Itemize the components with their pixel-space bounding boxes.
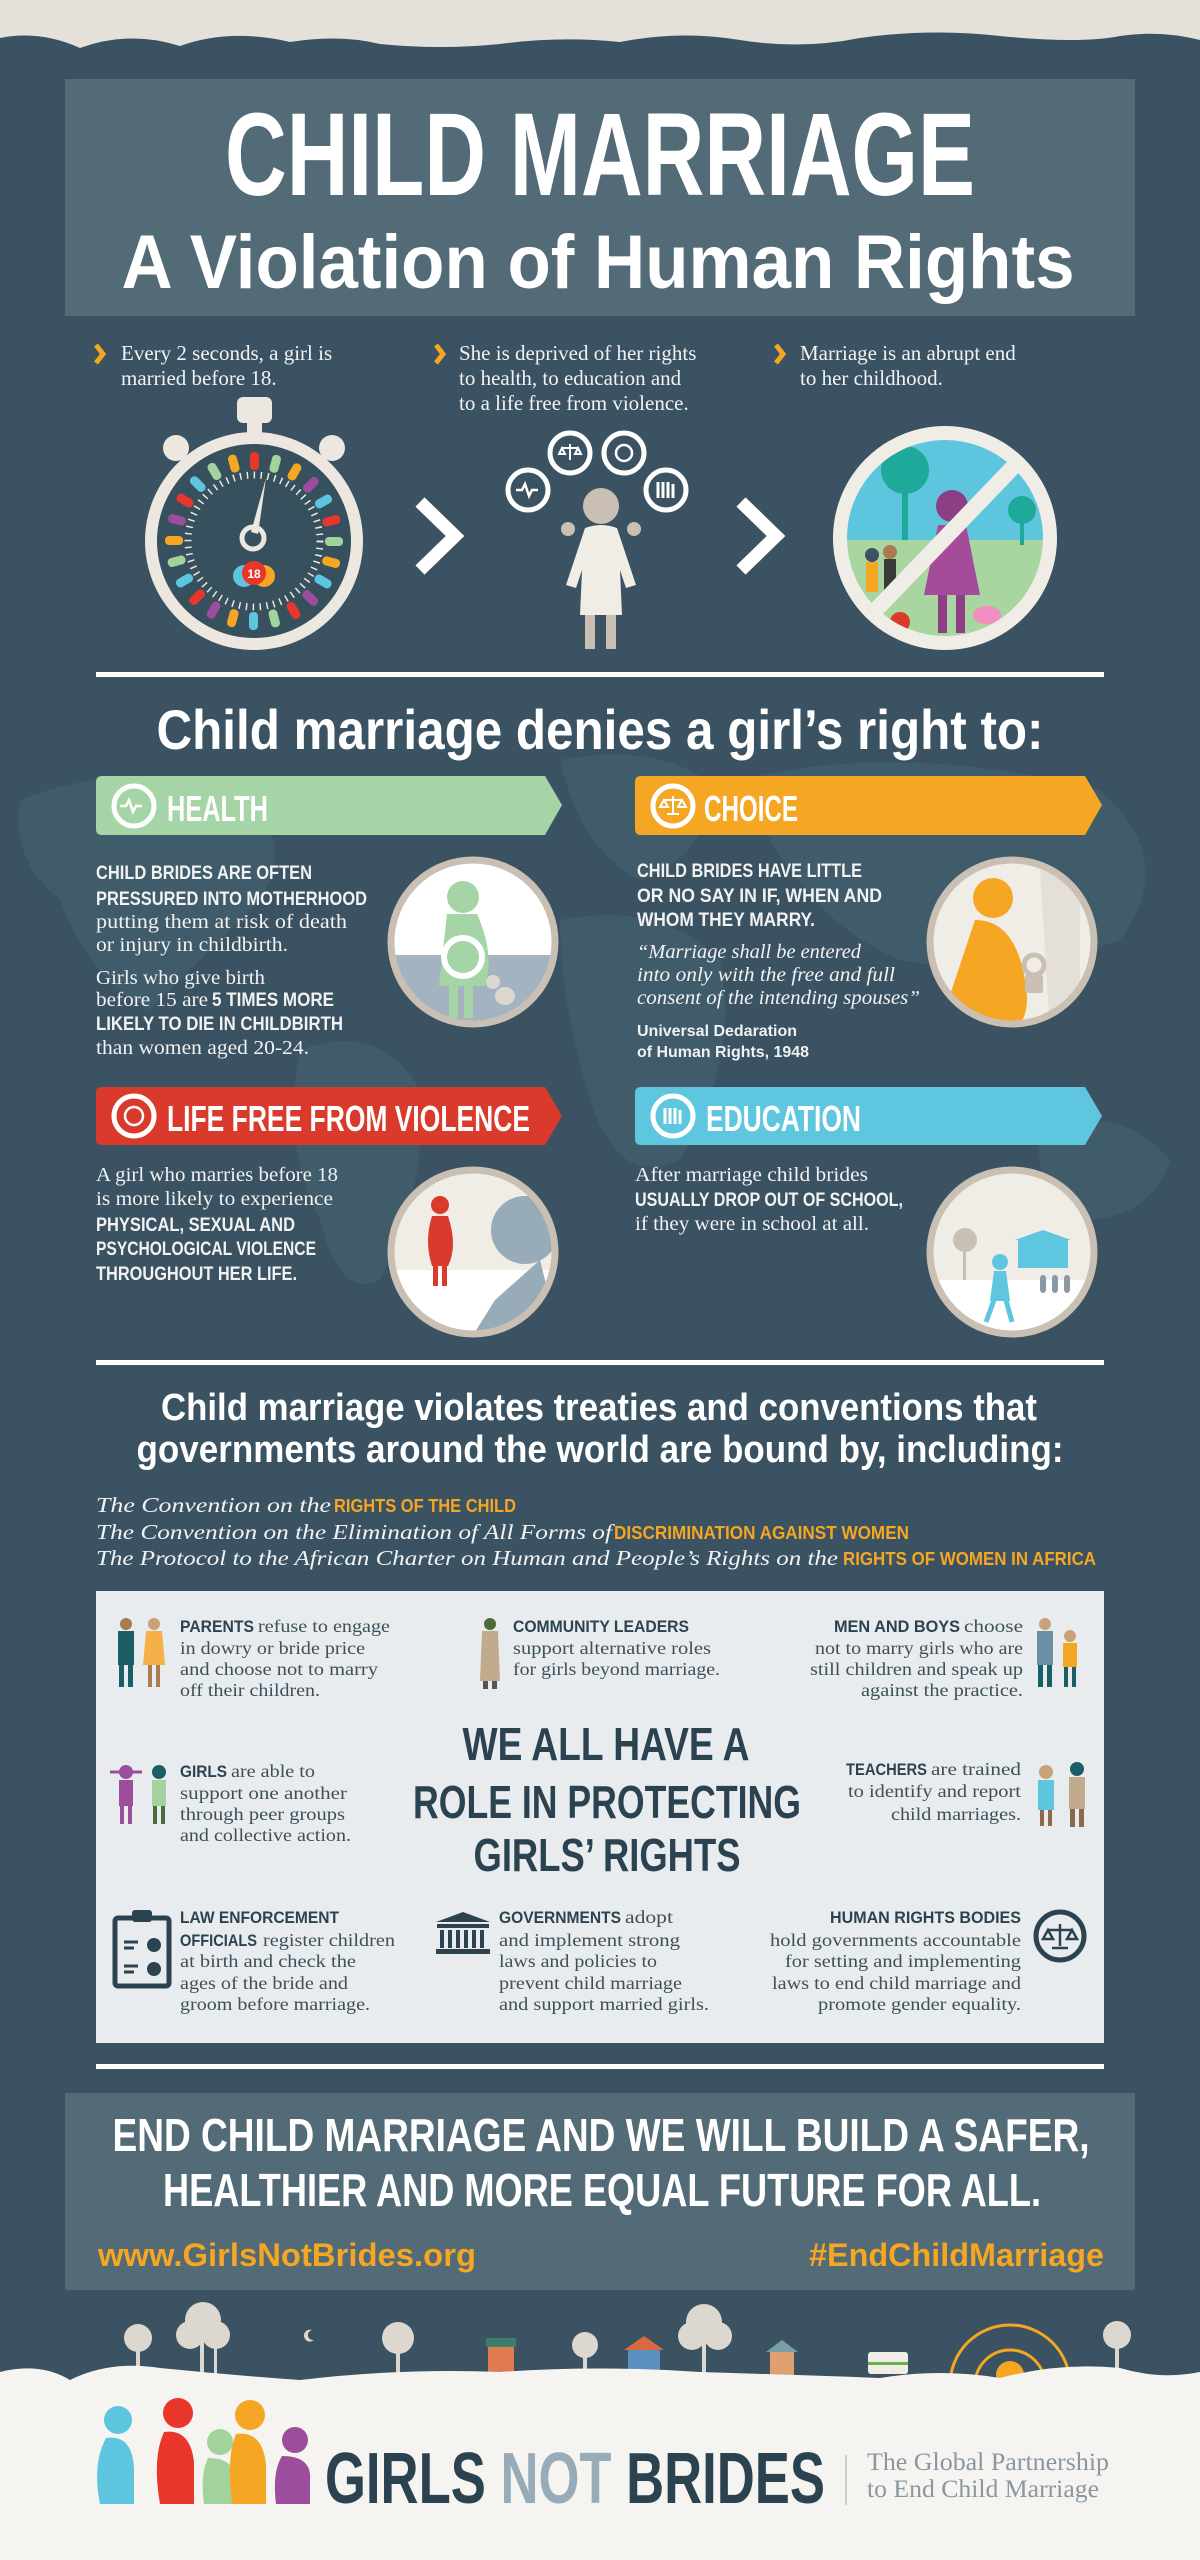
text: teachers [846,1759,1021,1824]
text: parents: off their children. [180,1680,320,1700]
top cream sky [0,0,1200,80]
text: human rights bodies: for setting and implementing [785,1951,1021,1971]
icon: teachers [1038,1762,1085,1827]
icon: community leader [480,1618,500,1689]
text: treaty list: The Protocol to the African Charter on Human and People’s Rights on the [96,1546,838,1570]
text: choice: WHOM THEY MARRY. [637,910,815,931]
banner: choice: CHOICE [704,788,798,829]
text: choice: “Marriage shall be entered [637,941,862,963]
text: human rights bodies [770,1908,1021,2014]
banner: education [635,1087,1102,1145]
icon: childhood forbidden circle [834,427,1056,650]
bullet 3: to her childhood. [800,366,943,390]
text: choice: of Human Rights, 1948 [637,1044,809,1061]
icon: girl leaving school [930,1170,1100,1340]
text: choice: CHILD BRIDES HAVE LITTLE [637,861,862,882]
text: parents [180,1616,390,1700]
icon: man and boy [1037,1618,1077,1687]
logo: girls not brides: to End Child Marriage [867,2476,1099,2503]
icon: government building [436,1912,490,1954]
text: law enforcement [180,1908,395,2014]
logo: girls not brides [97,2398,1109,2519]
text: health: before 15 are [96,989,208,1011]
bullet 1: married before 18. [121,366,277,390]
text: teachers: TEACHERS [846,1760,927,1779]
banner: violence: LIFE FREE FROM VIOLENCE [167,1098,530,1139]
text: men and boys [810,1616,1023,1700]
text: health: Girls who give birth [96,967,265,989]
heading: treaties [136,1387,1064,1471]
text: choice [637,861,920,1061]
arrow 2 [741,502,776,570]
text: governments [499,1907,709,2014]
text: health [96,863,367,1059]
text: choice: into only with the free and full [637,964,895,986]
text: law enforcement: register children [263,1930,395,1950]
text: governments: GOVERNMENTS [499,1908,621,1927]
text: violence: PSYCHOLOGICAL VIOLENCE [96,1239,316,1260]
text: community leaders: COMMUNITY LEADERS [513,1617,689,1636]
text: parents: in dowry or bride price [180,1638,365,1658]
text: health: LIKELY TO DIE IN CHILDBIRTH [96,1014,343,1035]
text: health: CHILD BRIDES ARE OFTEN [96,863,312,884]
heading: treaties: governments around the world are bound by, including: [136,1429,1064,1471]
icon: scales [1036,1912,1084,1960]
text: governments: adopt [625,1907,673,1927]
text: community leaders: for girls beyond marriage. [513,1659,720,1679]
text: health: or injury in childbirth. [96,934,288,956]
text: violence [96,1164,338,1285]
callout: end child marriage [65,2093,1135,2290]
text: health: putting them at risk of death [96,911,347,933]
text: teachers: are trained [931,1759,1021,1779]
text: choice: consent of the intending spouses” [637,987,920,1009]
text: treaty list: DISCRIMINATION AGAINST WOMEN [614,1523,909,1543]
text: governments: prevent child marriage [499,1973,682,1993]
world map faint background [18,754,1170,1284]
text: girls: support one another [180,1783,347,1803]
panel: violence [96,1087,562,1340]
icon: parents [118,1618,165,1687]
text: governments: and support married girls. [499,1994,709,2014]
text: human rights bodies: HUMAN RIGHTS BODIES [830,1908,1021,1927]
text: men and boys: choose [964,1616,1023,1636]
bullet 2: to health, to education and [459,366,682,390]
callout: end child marriage: www.GirlsNotBrides.org [97,2237,476,2273]
text: teachers: to identify and report [848,1781,1021,1801]
callout: end child marriage: #EndChildMarriage [809,2237,1104,2273]
text: girls: GIRLS [180,1762,227,1781]
panel: choice [635,776,1102,1061]
text: girls [180,1761,351,1845]
text: violence: is more likely to experience [96,1188,333,1210]
text: violence: THROUGHOUT HER LIFE. [96,1264,297,1285]
text: treaty list: The Convention on the [96,1493,331,1517]
icon: girl with rights icons [508,433,686,649]
icon: girl with lock [930,860,1094,1040]
text: governments: laws and policies to [499,1951,657,1971]
arrow 1 [420,502,455,570]
icon: stopwatch: 18 [247,567,261,581]
text: human rights bodies: laws to end child marriage and [772,1973,1021,1993]
text: health: than women aged 20-24. [96,1037,309,1059]
icon: girls [110,1765,166,1824]
text: men and boys: against the practice. [861,1680,1023,1700]
text: teachers: child marriages. [891,1804,1021,1824]
text: community leaders [513,1617,720,1679]
banner: health: HEALTH [167,788,268,829]
bullet 1 [96,341,332,390]
text: choice: OR NO SAY IN IF, WHEN AND [637,886,882,907]
text: health: 5 TIMES MORE [212,990,334,1011]
text: human rights bodies: promote gender equality. [818,1994,1021,2014]
panel: roles [96,1591,1104,2043]
text: health: PRESSURED INTO MOTHERHOOD [96,889,367,910]
heading: treaties: Child marriage violates treaties and conventions that [161,1387,1037,1429]
icon: pregnant girl [390,860,560,1035]
logo: girls not brides: The Global Partnership [867,2449,1109,2476]
text: parents: refuse to engage [258,1616,390,1636]
banner: violence [96,1087,562,1145]
heading: we all have a role [413,1718,801,1881]
landscape [0,2302,1200,2560]
text: treaty list: The Convention on the Elimination of All Forms of [96,1520,616,1544]
text: girls: are able to [231,1761,315,1781]
bullet 2: She is deprived of her rights [459,341,696,365]
heading: denies: Child marriage denies a girl’s right to: [156,698,1044,761]
text: human rights bodies: hold governments accountable [770,1930,1021,1950]
bullet 2 [436,341,696,415]
bullet 2: to a life free from violence. [459,391,689,415]
heading: we all have a role: ROLE IN PROTECTING [413,1776,801,1828]
text: treaty list [96,1493,1096,1570]
banner: health [96,776,562,835]
text: education: USUALLY DROP OUT OF SCHOOL, [635,1190,903,1211]
text: community leaders: support alternative roles [513,1638,711,1658]
bullet 3: Marriage is an abrupt end [800,341,1016,365]
text: men and boys: MEN AND BOYS [834,1617,960,1636]
text: men and boys: not to marry girls who are [815,1638,1023,1658]
text: education: After marriage child brides [635,1164,868,1186]
title box: A Violation of Human Rights [122,220,1074,305]
panel: education [635,1087,1102,1340]
text: law enforcement: OFFICIALS [180,1931,257,1950]
icon: stopwatch [145,397,363,650]
text: education [635,1164,903,1235]
icon: girl and shadow [390,1170,560,1340]
text: girls: and collective action. [180,1825,351,1845]
banner: choice [635,776,1102,835]
text: men and boys: still children and speak up [810,1659,1023,1679]
logo: girls not brides: GIRLS NOT BRIDES [325,2439,825,2519]
banner: education: EDUCATION [706,1098,861,1139]
panel: health [96,776,562,1059]
icon: clipboard [115,1910,169,1986]
text: parents: PARENTS [180,1617,254,1636]
text: violence: PHYSICAL, SEXUAL AND [96,1215,295,1236]
text: law enforcement: LAW ENFORCEMENT [180,1908,340,1927]
title box [65,79,1135,316]
text: parents: and choose not to marry [180,1659,378,1679]
bullet 1: Every 2 seconds, a girl is [121,341,332,365]
text: governments: and implement strong [499,1930,680,1950]
text: law enforcement: groom before marriage. [180,1994,370,2014]
text: violence: A girl who marries before 18 [96,1164,338,1186]
text: treaty list: RIGHTS OF WOMEN IN AFRICA [843,1549,1096,1569]
bullet 3 [776,341,1016,390]
text: choice: Universal Dedaration [637,1023,797,1040]
text: law enforcement: at birth and check the [180,1951,356,1971]
text: law enforcement: ages of the bride and [180,1973,348,1993]
text: education: if they were in school at all. [635,1213,869,1235]
heading: we all have a role: WE ALL HAVE A [462,1718,750,1770]
heading: we all have a role: GIRLS’ RIGHTS [474,1829,740,1881]
text: treaty list: RIGHTS OF THE CHILD [334,1496,516,1516]
text: girls: through peer groups [180,1804,345,1824]
